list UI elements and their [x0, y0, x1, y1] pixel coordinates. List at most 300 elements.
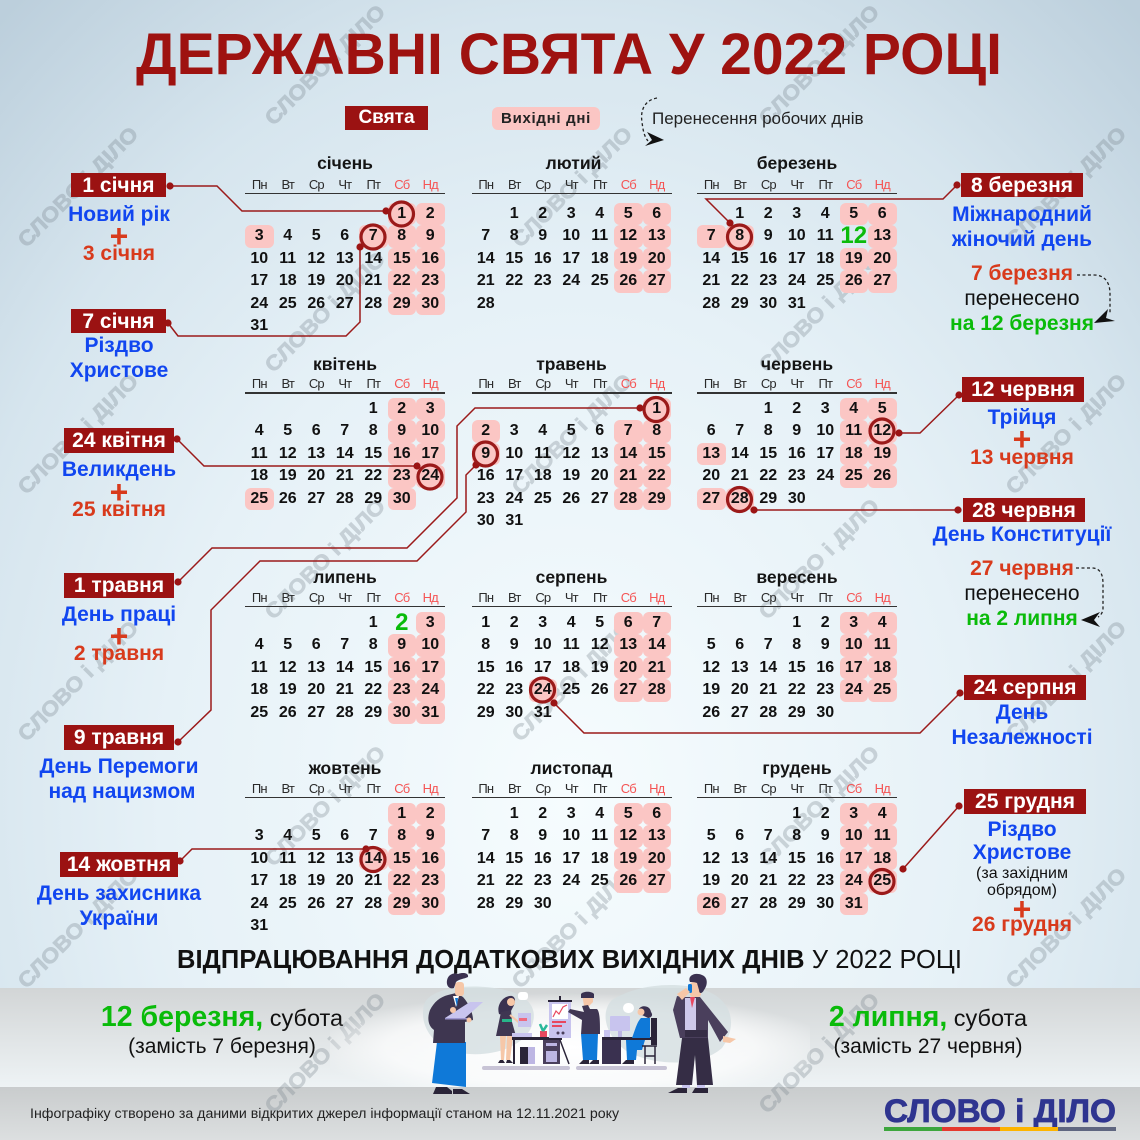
calendar: березень: Чт: [790, 177, 803, 192]
calendar: лютий: 11: [591, 227, 608, 244]
calendar: травень: 29: [648, 490, 666, 507]
calendar: серпень: 26: [591, 681, 609, 698]
calendar: листопад: Нд: [649, 781, 664, 796]
figure: desk with computer: [512, 1024, 569, 1064]
calendar: серпень: 31: [534, 704, 552, 721]
calendar: квітень: 7: [340, 422, 349, 439]
callout: 7 січня: Христове: [70, 359, 168, 382]
calendar: січень: 7: [369, 227, 378, 244]
callout: 25 грудня: (за західним: [976, 865, 1068, 882]
calendar: червень: 10: [816, 422, 834, 439]
calendar: квітень: 22: [364, 467, 382, 484]
legend: holidays: [345, 106, 428, 130]
callout: 1 травня: 1 травня: [74, 574, 164, 597]
calendar: листопад: 15: [505, 850, 523, 867]
calendar: січень: 8: [397, 227, 406, 244]
calendar: січень: 24: [250, 295, 268, 312]
calendar: квітень: 4: [255, 422, 264, 439]
watermarks: СЛОВО і ДІЛО: [14, 864, 143, 993]
calendar: листопад: 8: [510, 827, 519, 844]
calendar: лютий: лютий: [546, 153, 601, 173]
calendar: листопад: 1: [510, 805, 519, 822]
calendar: лютий: Чт: [565, 177, 578, 192]
calendar: листопад: 27: [648, 872, 666, 889]
calendar: березень: 4: [821, 205, 830, 222]
callout: 8 березня: Міжнародний: [952, 203, 1092, 226]
calendar: червень: 12: [873, 422, 891, 439]
callout: 28 червня: День Конституції: [933, 523, 1111, 546]
connector: 24 квітня: [173, 435, 442, 489]
calendar: серпень: 28: [648, 681, 666, 698]
calendar: квітень: 14: [336, 445, 354, 462]
calendar: березень: 17: [788, 250, 806, 267]
calendar: лютий: 14: [477, 250, 495, 267]
callout: 28 червня: 27 червня: [970, 557, 1074, 580]
calendar: квітень: Нд: [423, 376, 438, 391]
calendar: жовтень: 24: [250, 895, 268, 912]
calendar: вересень: 10: [845, 636, 863, 653]
calendar: листопад: Чт: [565, 781, 578, 796]
calendar: вересень: 19: [702, 681, 720, 698]
calendar: серпень: 18: [562, 659, 580, 676]
calendar: листопад: 17: [562, 850, 580, 867]
watermarks: СЛОВО і ДІЛО: [1002, 617, 1131, 746]
calendar: вересень: 11: [874, 636, 891, 653]
calendar: липень: 5: [283, 636, 292, 653]
calendar: грудень: 5: [707, 827, 716, 844]
calendar: вересень: 23: [816, 681, 834, 698]
calendar: січень: 29: [393, 295, 411, 312]
calendar: травень: 9: [481, 445, 490, 462]
calendar: травень: Вт: [508, 376, 520, 391]
calendar: листопад: [472, 758, 672, 912]
calendar: грудень: 24: [845, 872, 863, 889]
calendar: жовтень: 31: [250, 917, 268, 934]
calendar: травень: 12: [562, 445, 580, 462]
calendar: квітень: 24: [421, 467, 439, 484]
calendar: липень: 19: [279, 681, 297, 698]
calendar: березень: 25: [816, 272, 834, 289]
calendar: серпень: 10: [534, 636, 552, 653]
calendar: червень: 13: [702, 445, 720, 462]
calendar: вересень: Ср: [761, 590, 776, 605]
text: 2 липня: 2 липня, субота: [829, 1001, 1027, 1033]
calendar: грудень: 11: [874, 827, 891, 844]
title: ДЕРЖАВНІ СВЯТА У 2022 РОЦІ: [136, 22, 1002, 87]
calendar: липень: 29: [364, 704, 382, 721]
callout: 24 серпня: День: [996, 701, 1048, 724]
calendar: січень: 20: [336, 272, 354, 289]
calendar: вересень: вересень: [756, 567, 838, 587]
callout: 12 червня: Трійця: [988, 406, 1056, 429]
calendar: жовтень: Пн: [252, 781, 267, 796]
calendar: грудень: 12: [702, 850, 720, 867]
calendar: березень: 21: [702, 272, 720, 289]
calendar: листопад: 26: [619, 872, 637, 889]
calendar: квітень: 20: [307, 467, 325, 484]
calendar: липень: 1: [369, 614, 378, 631]
calendar: квітень: квітень: [313, 354, 377, 374]
calendar: листопад: Пт: [593, 781, 606, 796]
calendar: червень: 22: [759, 467, 777, 484]
calendar: квітень: Вт: [282, 376, 294, 391]
calendar: січень: 1: [397, 205, 406, 222]
calendar: жовтень: 15: [393, 850, 411, 867]
calendar: жовтень: 26: [307, 895, 325, 912]
calendar: листопад: 20: [648, 850, 666, 867]
calendar: лютий: 26: [619, 272, 637, 289]
calendar: вересень: 8: [792, 636, 801, 653]
calendar: квітень: 21: [336, 467, 354, 484]
calendar: травень: 16: [477, 467, 495, 484]
calendar: вересень: 30: [816, 704, 834, 721]
calendar: лютий: 4: [595, 205, 604, 222]
arrow: 7 to 12 березня: [1077, 275, 1115, 323]
calendar: листопад: Сб: [621, 781, 636, 796]
calendar: січень: 6: [340, 227, 349, 244]
calendar: листопад: 16: [534, 850, 552, 867]
calendar: грудень: 9: [821, 827, 830, 844]
heading: worked days: ВІДПРАЦЮВАННЯ ДОДАТКОВИХ ВИХІДНИХ ДНІВ У 2022 РОЦІ: [177, 946, 962, 974]
calendar: листопад: Пн: [478, 781, 493, 796]
calendar: січень: 13: [336, 250, 354, 267]
callout: 28 червня: на 2 липня: [966, 607, 1078, 630]
calendar: червень: Пт: [818, 376, 832, 391]
calendar: серпень: Пт: [593, 590, 606, 605]
callout: 8 березня: 7 березня: [971, 262, 1073, 285]
calendar: січень: 14: [364, 250, 382, 267]
calendar: червень: Вт: [734, 376, 746, 391]
calendar: серпень: 13: [619, 636, 637, 653]
calendar: жовтень: 20: [336, 872, 354, 889]
calendar: травень: 5: [567, 422, 576, 439]
calendar: березень: Пн: [704, 177, 719, 192]
calendar: липень: 21: [336, 681, 354, 698]
calendar: липень: 9: [397, 636, 406, 653]
calendar: вересень: 7: [764, 636, 773, 653]
calendar: липень: 18: [250, 681, 268, 698]
calendar: липень: 28: [336, 704, 354, 721]
calendar: жовтень: 27: [336, 895, 354, 912]
calendar: червень: Пн: [704, 376, 719, 391]
calendar: квітень: 28: [336, 490, 354, 507]
calendar: січень: Пн: [252, 177, 267, 192]
calendar: травень: 13: [591, 445, 609, 462]
calendar: грудень: Чт: [790, 781, 803, 796]
calendar: травень: 15: [648, 445, 666, 462]
calendar: лютий: 2: [538, 205, 547, 222]
calendar: червень: 1: [764, 400, 773, 417]
calendar: листопад: 3: [567, 805, 576, 822]
calendar: жовтень: [245, 758, 445, 934]
calendar: листопад: 30: [534, 895, 552, 912]
watermarks: СЛОВО і ДІЛО: [1002, 370, 1131, 499]
calendar: грудень: [697, 758, 897, 915]
calendar: вересень: 22: [788, 681, 806, 698]
calendar: травень: 6: [595, 422, 604, 439]
calendar: вересень: 28: [759, 704, 777, 721]
callout: 12 червня: +: [1013, 421, 1031, 457]
calendar: лютий: Вт: [508, 177, 520, 192]
text: 12 березня: [101, 1001, 344, 1058]
callout: 7 січня: [70, 309, 168, 382]
footer note: Інфографіку створено за даними відкритих джерел інформації станом на 12.11.2021 року: [30, 1106, 619, 1122]
legend: weekends: [492, 107, 600, 130]
calendar: липень: Чт: [338, 590, 351, 605]
figure: man on phone: [668, 974, 736, 1093]
calendar: липень: Вт: [282, 590, 294, 605]
calendar: вересень: [697, 567, 897, 721]
calendar: липень: Ср: [309, 590, 324, 605]
callout: 8 березня: перенесено: [964, 287, 1080, 310]
calendar: червень: 11: [845, 422, 862, 439]
calendar: липень: 23: [393, 681, 411, 698]
figure: presenter: [568, 992, 600, 1064]
callout: 1 травня: День праці: [62, 603, 176, 626]
calendar: травень: 30: [477, 512, 495, 529]
calendar: квітень: 8: [369, 422, 378, 439]
calendar: квітень: Пт: [366, 376, 380, 391]
calendar: червень: 23: [788, 467, 806, 484]
calendar: липень: [245, 567, 445, 724]
callout: 1 січня: [68, 173, 170, 265]
calendar: листопад: 6: [652, 805, 661, 822]
watermarks: СЛОВО і ДІЛО: [508, 864, 637, 993]
calendar: липень: 3: [426, 614, 435, 631]
calendar: вересень: 26: [702, 704, 720, 721]
calendar: липень: Сб: [394, 590, 409, 605]
callout: 1 січня: +: [110, 218, 128, 254]
calendar: квітень: 6: [312, 422, 321, 439]
calendar: серпень: 11: [563, 636, 580, 653]
calendar: січень: 30: [421, 295, 439, 312]
calendar: серпень: Пн: [478, 590, 493, 605]
text: 12 березня: 12 березня, субота: [101, 1001, 343, 1033]
calendar: листопад: 22: [505, 872, 523, 889]
calendar: травень: 7: [624, 422, 633, 439]
calendar: квітень: 30: [393, 490, 411, 507]
calendar: березень: 29: [731, 295, 749, 312]
calendar: липень: 7: [340, 636, 349, 653]
calendar: грудень: 21: [759, 872, 777, 889]
calendar: січень: 11: [279, 250, 296, 267]
calendar: грудень: 8: [792, 827, 801, 844]
calendar: квітень: 10: [421, 422, 439, 439]
calendar: липень: 16: [393, 659, 411, 676]
legend: weekends: Вихідні дні: [501, 110, 591, 127]
calendar: лютий: [472, 153, 672, 312]
calendar: травень: 28: [619, 490, 637, 507]
calendar: березень: 22: [731, 272, 749, 289]
figure: woman at computer: [602, 1003, 657, 1064]
calendar: грудень: 20: [731, 872, 749, 889]
calendar: липень: Пн: [252, 590, 267, 605]
calendar: березень: 3: [792, 205, 801, 222]
calendar: жовтень: 2: [426, 805, 435, 822]
calendar: січень: 28: [364, 295, 382, 312]
calendar: серпень: 19: [591, 659, 609, 676]
calendar: серпень: 15: [477, 659, 495, 676]
calendar: лютий: 5: [624, 205, 633, 222]
calendar: вересень: 18: [873, 659, 891, 676]
calendar: лютий: 17: [562, 250, 580, 267]
calendar: грудень: 7: [764, 827, 773, 844]
calendar: липень: липень: [313, 567, 377, 587]
calendar: жовтень: Ср: [309, 781, 324, 796]
callout: 14 жовтня: 14 жовтня: [67, 853, 171, 876]
calendar: червень: 9: [792, 422, 801, 439]
calendar: серпень: 9: [510, 636, 519, 653]
watermarks: СЛОВО і ДІЛО: [508, 617, 637, 746]
calendar: грудень: 2: [821, 805, 830, 822]
callout: 24 серпня: 24 серпня: [973, 676, 1076, 699]
calendar: листопад: 12: [619, 827, 637, 844]
calendar: січень: 21: [364, 272, 382, 289]
calendar: березень: 11: [817, 227, 834, 244]
calendar: травень: 14: [619, 445, 637, 462]
calendar: серпень: 27: [619, 681, 637, 698]
calendar: вересень: 17: [845, 659, 863, 676]
calendar: листопад: 11: [591, 827, 608, 844]
callout: 12 червня: 13 червня: [970, 446, 1074, 469]
calendar: лютий: 21: [477, 272, 495, 289]
calendar: липень: 27: [307, 704, 325, 721]
calendar: квітень: 26: [279, 490, 297, 507]
calendar: серпень: 1: [481, 614, 490, 631]
legend: transfer text: Перенесення робочих днів: [652, 109, 864, 128]
calendar: вересень: 4: [878, 614, 887, 631]
calendar: січень: 22: [393, 272, 411, 289]
calendar: січень: 27: [336, 295, 354, 312]
calendar: жовтень: Сб: [394, 781, 409, 796]
calendar: серпень: 30: [505, 704, 523, 721]
calendar: грудень: Пт: [818, 781, 832, 796]
connector: 24 серпня: [530, 678, 964, 733]
watermarks: СЛОВО і ДІЛО: [261, 989, 390, 1118]
calendar: листопад: Вт: [508, 781, 520, 796]
calendar: жовтень: 28: [364, 895, 382, 912]
calendar: липень: 6: [312, 636, 321, 653]
calendar: жовтень: 8: [397, 827, 406, 844]
calendar: травень: 17: [505, 467, 523, 484]
calendar: грудень: Нд: [875, 781, 890, 796]
calendar: травень: 31: [505, 512, 523, 529]
calendar: березень: Сб: [846, 177, 861, 192]
calendar: липень: 22: [364, 681, 382, 698]
calendar: березень: 19: [845, 250, 863, 267]
callout: 1 травня: 2 травня: [74, 642, 164, 665]
calendar: травень: 23: [477, 490, 495, 507]
calendar: травень: Ср: [535, 376, 550, 391]
calendar: січень: Ср: [309, 177, 324, 192]
watermarks: СЛОВО і ДІЛО: [508, 123, 637, 252]
calendar: червень: Ср: [761, 376, 776, 391]
calendar: березень: [697, 153, 897, 312]
calendar: травень: Пт: [593, 376, 606, 391]
calendar: березень: 26: [845, 272, 863, 289]
calendar: червень: 19: [873, 445, 891, 462]
calendar: серпень: 21: [648, 659, 666, 676]
calendar: березень: Нд: [875, 177, 890, 192]
calendar: травень: 8: [652, 422, 661, 439]
calendar: листопад: 13: [648, 827, 666, 844]
calendar: квітень: 13: [307, 445, 325, 462]
calendar: грудень: 3: [849, 805, 858, 822]
calendar: вересень: 3: [849, 614, 858, 631]
calendar: вересень: 16: [816, 659, 834, 676]
calendar: листопад: 2: [538, 805, 547, 822]
calendar: серпень: серпень: [536, 567, 607, 587]
text: 12 березня: (замість 7 березня): [128, 1035, 316, 1058]
calendar: липень: 10: [421, 636, 439, 653]
callout: 12 червня: 12 червня: [971, 378, 1075, 401]
calendar: червень: 20: [702, 467, 720, 484]
calendar: жовтень: 22: [393, 872, 411, 889]
calendar: грудень: 25: [873, 872, 891, 889]
calendar: травень: 10: [505, 445, 523, 462]
calendar: липень: 2: [395, 609, 408, 636]
calendar: травень: Пн: [478, 376, 493, 391]
calendar: серпень: 24: [534, 681, 552, 698]
calendar: січень: 10: [250, 250, 268, 267]
calendar: липень: 30: [393, 704, 411, 721]
calendar: лютий: 9: [538, 227, 547, 244]
calendar: вересень: 29: [788, 704, 806, 721]
connector: 9 травня: [174, 442, 498, 746]
calendar: червень: 7: [735, 422, 744, 439]
calendar: червень: 24: [816, 467, 834, 484]
legend: transfer arrow: [640, 97, 664, 146]
calendar: березень: Вт: [734, 177, 746, 192]
watermarks: СЛОВО і ДІЛО: [261, 248, 390, 377]
calendar: березень: 2: [764, 205, 773, 222]
watermarks: СЛОВО і ДІЛО: [755, 742, 884, 871]
calendar: березень: 8: [735, 227, 744, 244]
calendar: серпень: [472, 567, 672, 721]
calendar: вересень: 20: [731, 681, 749, 698]
calendar: березень: 14: [702, 250, 720, 267]
callout: 25 грудня: Христове: [973, 841, 1071, 864]
calendar: лютий: 23: [534, 272, 552, 289]
calendar: липень: 4: [255, 636, 264, 653]
calendar: травень: 22: [648, 467, 666, 484]
calendar: січень: 25: [279, 295, 297, 312]
watermarks: СЛОВО і ДІЛО: [261, 1, 390, 130]
calendar: лютий: 6: [652, 205, 661, 222]
calendar: січень: Чт: [338, 177, 351, 192]
calendar: травень: 18: [534, 467, 552, 484]
calendar: лютий: 27: [648, 272, 666, 289]
calendar: серпень: Сб: [621, 590, 636, 605]
calendar: грудень: 1: [792, 805, 801, 822]
calendar: серпень: Чт: [565, 590, 578, 605]
calendar: вересень: 5: [707, 636, 716, 653]
callout: 24 квітня: 25 квітня: [72, 498, 166, 521]
calendar: липень: 12: [279, 659, 297, 676]
callout: 14 жовтня: України: [80, 907, 158, 930]
calendar: березень: 5: [849, 205, 858, 222]
calendar: серпень: 23: [505, 681, 523, 698]
calendar: грудень: 19: [702, 872, 720, 889]
calendar: березень: березень: [757, 153, 837, 173]
callout: 1 травня: [62, 573, 176, 665]
calendar: листопад: 25: [591, 872, 609, 889]
calendar: червень: 4: [849, 400, 858, 417]
calendar: листопад: 21: [477, 872, 495, 889]
calendar: грудень: 31: [845, 895, 863, 912]
calendar: листопад: 23: [534, 872, 552, 889]
logo: СЛОВО і ДІЛО: [884, 1093, 1116, 1129]
